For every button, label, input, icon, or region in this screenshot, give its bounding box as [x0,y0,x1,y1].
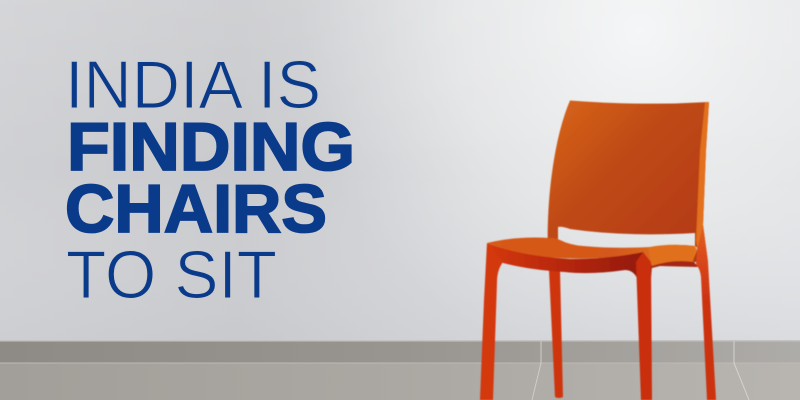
chair: front-right leg [636,252,652,400]
headline line: CHAIRS: CHAIRS [65,171,327,247]
chair: front-left leg [480,243,503,400]
headline line: INDIA IS: INDIA IS [65,47,321,123]
headline [65,47,355,313]
chair: front apron [487,243,652,278]
headline line: TO SIT: TO SIT [66,237,277,313]
headline line: FINDING: FINDING [67,109,355,185]
orange chair [480,100,716,400]
chair: back-left leg [549,270,563,398]
chair: seat right section [648,245,695,267]
chair: rear-right leg [696,225,716,400]
chair: right edge highlight [696,102,709,262]
chair: seat [487,238,697,266]
background: skirting board and floor [0,340,800,400]
chair: backrest [548,100,709,262]
chair: rear shadow under seat [652,261,698,268]
